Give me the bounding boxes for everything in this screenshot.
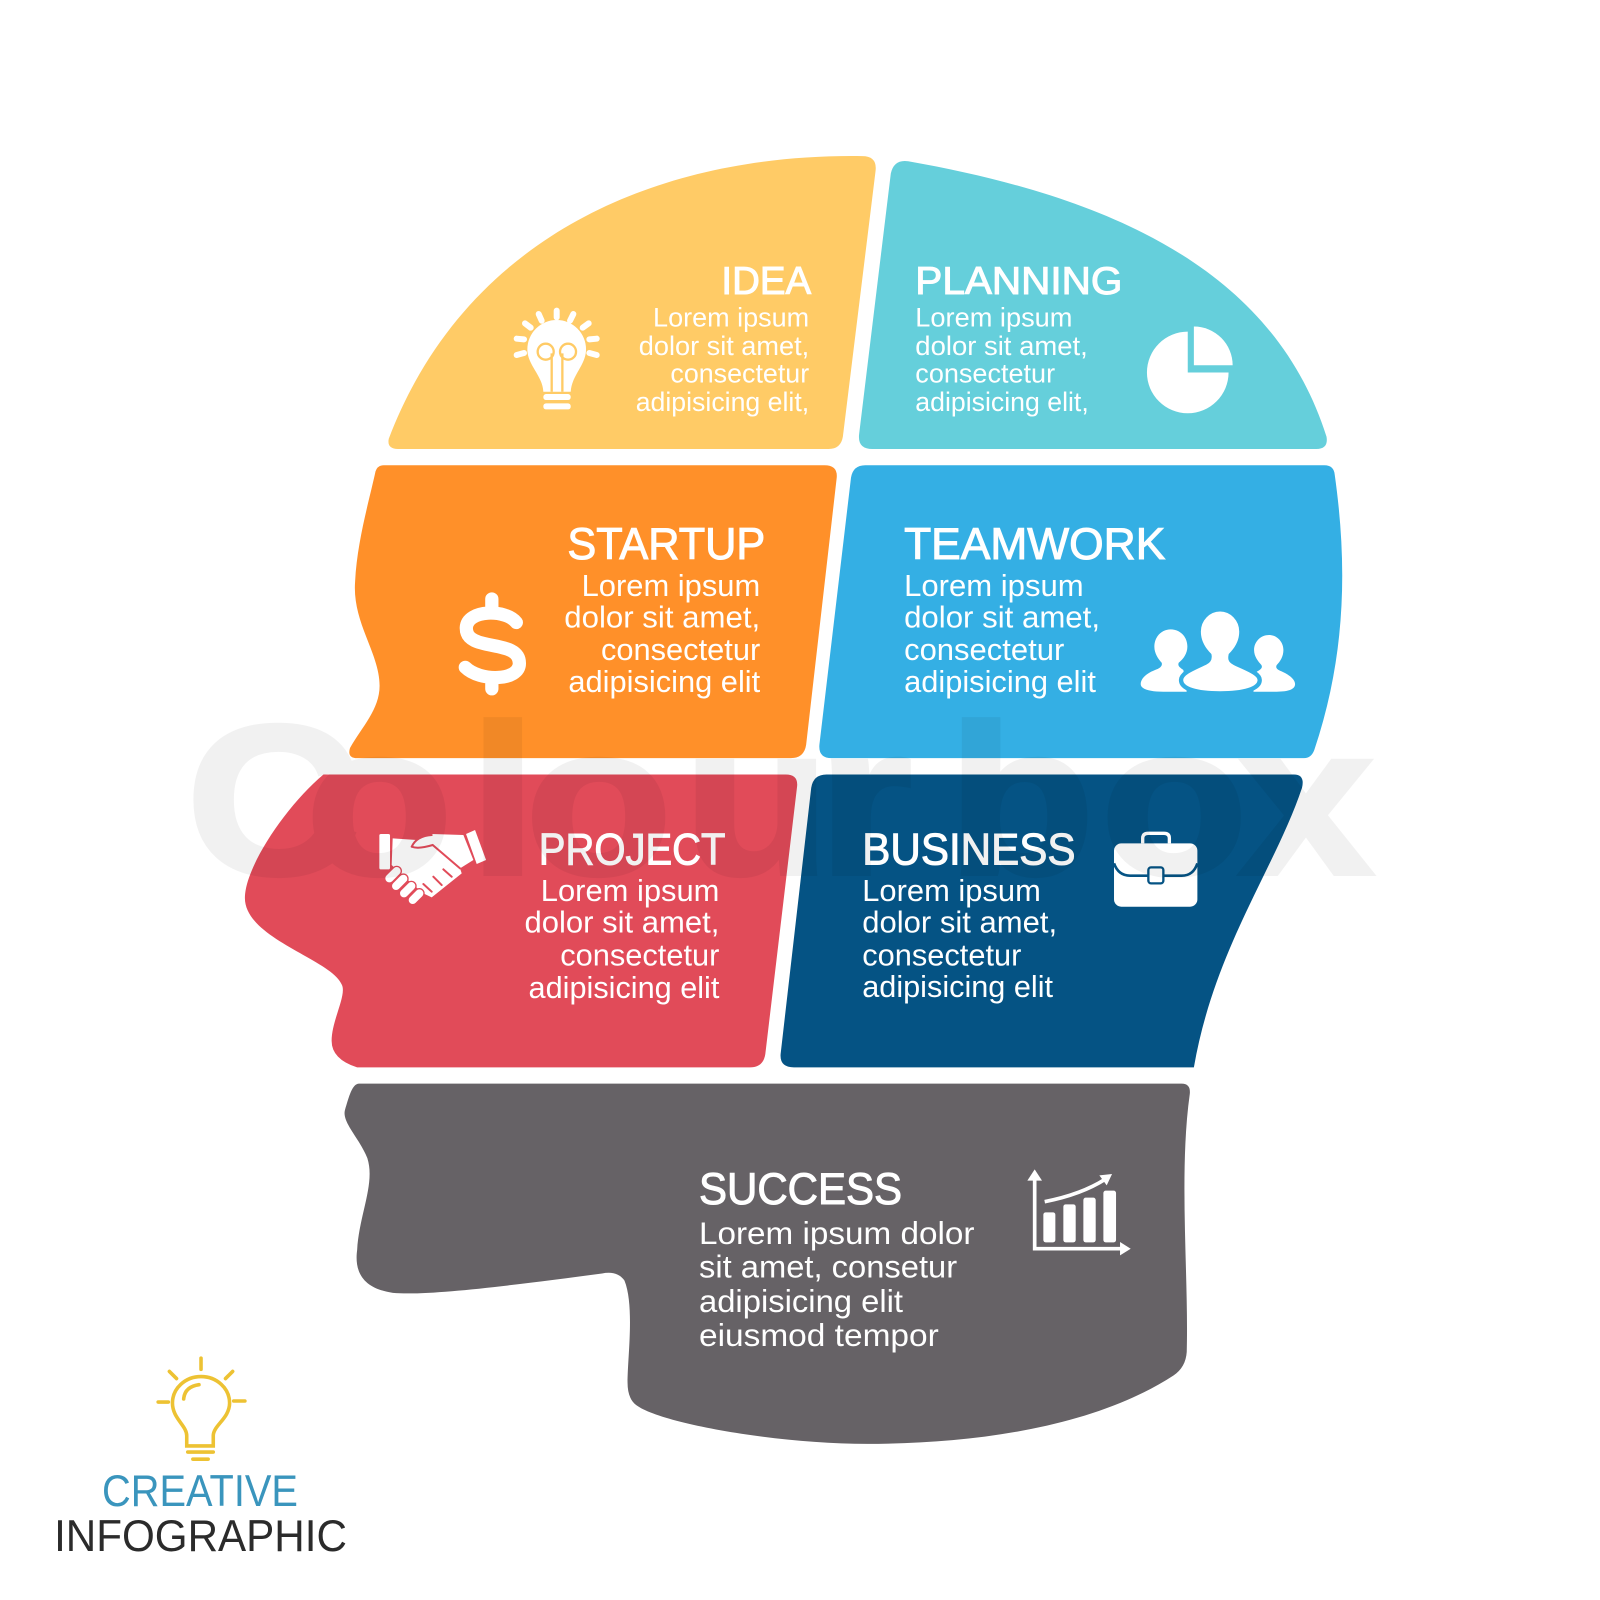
icon: growth chart [1027, 1169, 1131, 1255]
business text [862, 874, 1057, 1004]
logo text infographic: INFOGRAPHIC [54, 1510, 347, 1561]
icon: briefcase [1114, 833, 1197, 907]
startup text: dolor sit amet, [564, 601, 760, 635]
idea text: consectetur [670, 359, 809, 389]
panel: teamwork [819, 465, 1342, 758]
startup text [564, 569, 761, 699]
success heading: SUCCESS [699, 1163, 902, 1214]
teamwork shape [819, 465, 1342, 758]
business text: consectetur [862, 938, 1021, 972]
success text: Lorem ipsum dolor [699, 1215, 974, 1251]
idea text: adipisicing elit, [636, 387, 809, 417]
business text: adipisicing elit [862, 970, 1054, 1004]
project text: dolor sit amet, [524, 906, 719, 940]
idea heading: IDEA [721, 260, 811, 303]
idea text [636, 303, 809, 417]
teamwork text: Lorem ipsum [904, 569, 1084, 603]
panel: business [781, 774, 1303, 1067]
planning heading: PLANNING [915, 260, 1122, 303]
teamwork heading: TEAMWORK [904, 518, 1165, 569]
teamwork text: adipisicing elit [904, 665, 1096, 699]
planning text: Lorem ipsum [915, 303, 1072, 333]
icon: dollar [465, 599, 519, 689]
startup text: consectetur [601, 633, 760, 667]
teamwork text: dolor sit amet, [904, 601, 1100, 635]
business heading: BUSINESS [862, 823, 1076, 874]
planning text [915, 303, 1089, 417]
panel: startup [349, 465, 837, 758]
teamwork text: consectetur [904, 633, 1064, 667]
panel: success [345, 1084, 1190, 1444]
planning text: dolor sit amet, [915, 331, 1088, 361]
project text: consectetur [560, 938, 719, 972]
startup heading: STARTUP [567, 518, 765, 569]
success text: eiusmod tempor [699, 1317, 939, 1353]
panel: project [245, 774, 797, 1067]
planning text: consectetur [915, 359, 1055, 389]
project heading: PROJECT [539, 823, 726, 874]
business text: Lorem ipsum [862, 874, 1041, 908]
business text: dolor sit amet, [862, 906, 1057, 940]
project text [524, 874, 720, 1005]
watermark: Colourbox [186, 681, 1373, 919]
success text [699, 1215, 974, 1353]
idea text: dolor sit amet, [639, 331, 809, 361]
idea text: Lorem ipsum [653, 303, 809, 333]
planning shape [859, 161, 1327, 449]
business shape [781, 774, 1303, 1067]
startup text: adipisicing elit [568, 665, 761, 699]
project text: adipisicing elit [529, 971, 720, 1005]
logo: creative infographic [54, 1358, 347, 1561]
planning text: adipisicing elit, [915, 387, 1089, 417]
project shape [245, 774, 797, 1067]
icon: handshake [379, 830, 486, 900]
icon: light bulb [517, 311, 597, 409]
teamwork text [904, 569, 1100, 699]
panel: planning [859, 161, 1327, 449]
startup text: Lorem ipsum [582, 569, 760, 603]
icon: pie chart [1147, 327, 1233, 413]
success text: sit amet, consetur [699, 1249, 957, 1285]
success shape [345, 1084, 1190, 1444]
panel: idea [388, 156, 876, 449]
icon: team [1141, 609, 1295, 693]
project text: Lorem ipsum [541, 874, 719, 908]
logo text creative: CREATIVE [102, 1465, 298, 1516]
success text: adipisicing elit [699, 1283, 903, 1319]
logo bulb icon [158, 1358, 245, 1459]
idea shape [388, 156, 876, 449]
startup shape [349, 465, 837, 758]
